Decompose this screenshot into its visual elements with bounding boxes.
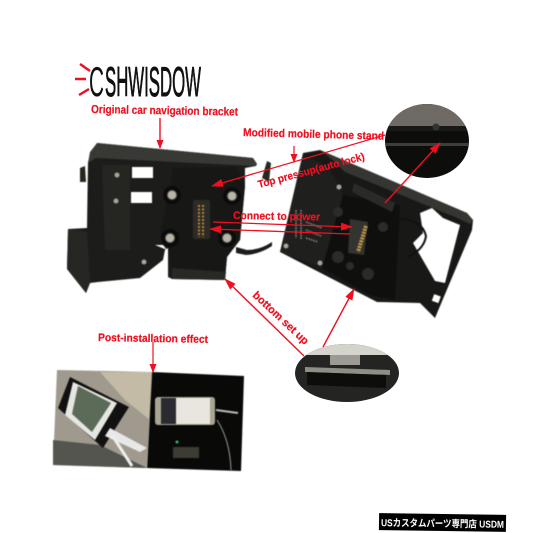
connector <box>348 219 368 255</box>
arrow: bottom set up left <box>225 279 304 356</box>
arrow: bottom set up right <box>323 289 354 347</box>
label: original bracket: Original car navigation bracket <box>91 103 238 119</box>
arrow: post-installation <box>152 342 154 372</box>
arrow: top press inset <box>385 143 440 203</box>
logo: CSHWISDOW <box>75 58 201 105</box>
screws <box>161 186 241 247</box>
text: SHWISDOW <box>105 58 201 105</box>
photo: motorcycle mounted phone <box>53 370 152 468</box>
arrow: connect to power right <box>213 222 352 227</box>
label: bottom set up: bottom set up <box>250 289 311 347</box>
connector <box>193 200 210 239</box>
arrow: top press <box>212 135 385 186</box>
left bracket: original car navigation bracket <box>67 143 272 293</box>
inset: bottom set up detail <box>295 344 399 402</box>
screws <box>284 184 342 266</box>
right bracket: modified mobile phone stand <box>280 150 473 318</box>
footer badge: shop name: USカスタムパーツ専門店 USDM <box>381 516 504 531</box>
photo: phone on dashboard at night <box>147 372 244 471</box>
inset: top press detail <box>385 104 469 178</box>
windows <box>132 167 153 178</box>
label: top press: Top pressup(auto lock) <box>257 151 366 191</box>
arrow: connect to power left <box>210 229 350 234</box>
label: connect to power: Connect to power <box>233 210 321 224</box>
label: post-installation: Post-installation effect <box>98 332 208 346</box>
footer badge: shop name <box>379 513 506 532</box>
logo: CSHWISDOW: C <box>89 58 104 105</box>
arrow: modified phone stand <box>293 146 295 162</box>
label: modified phone stand: Modified mobile phone stand <box>243 127 384 143</box>
cable <box>395 219 426 257</box>
serial label <box>296 210 322 242</box>
arrow: original bracket <box>159 118 161 148</box>
